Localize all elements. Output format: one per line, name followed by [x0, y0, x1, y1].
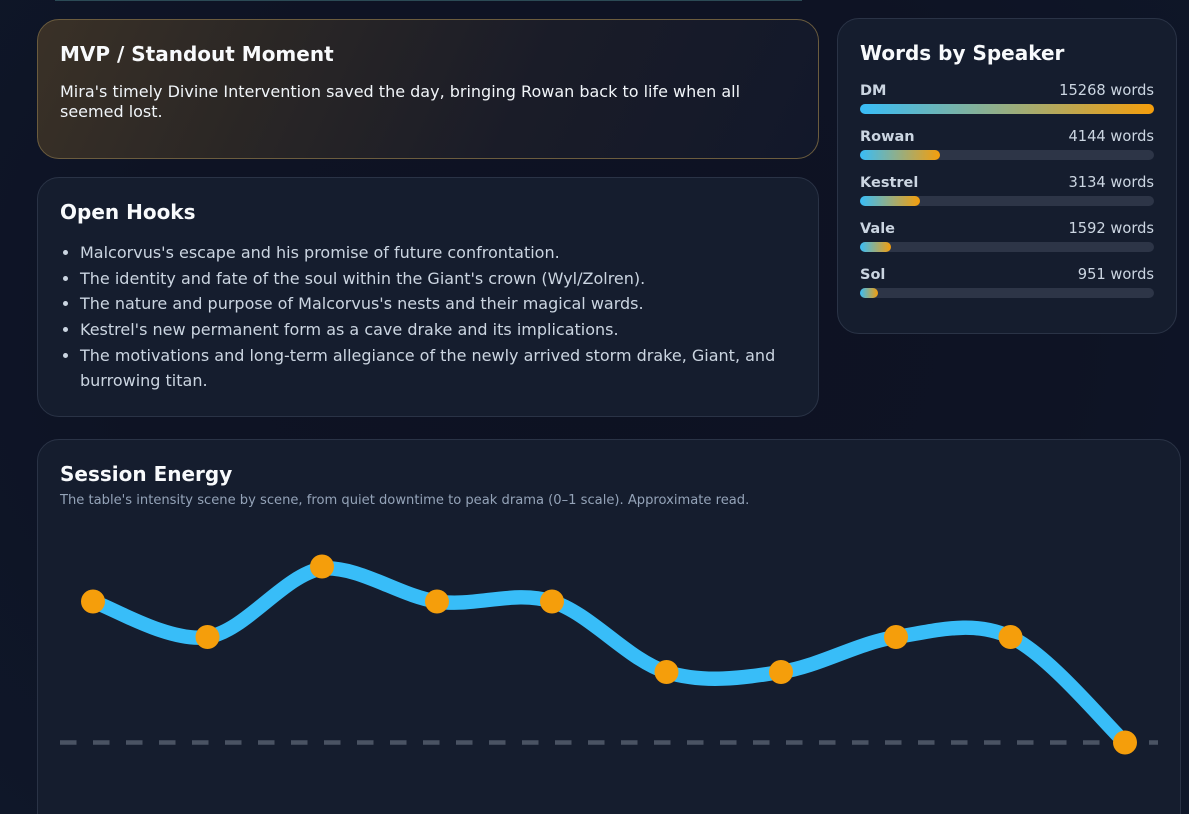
heading: words by speaker: Words by Speaker — [860, 41, 1064, 65]
bar: Vale — [860, 220, 1154, 252]
heading: MVP: MVP / Standout Moment — [60, 42, 334, 66]
bar: Vale: Vale — [860, 221, 895, 237]
data points — [81, 554, 1137, 754]
bar: Rowan — [860, 128, 1154, 160]
bar: Rowan: 4144 words — [1068, 128, 1154, 145]
bar: Sol — [860, 266, 1154, 298]
list: open hooks: The motivations and long-term allegiance of the newly arrived storm drake, Giant, and burrowing titan. — [80, 346, 775, 390]
bar: Kestrel: Kestrel — [860, 175, 918, 191]
bar: Sol: 951 words — [1078, 266, 1154, 283]
list: open hooks: Kestrel's new permanent form as a cave drake and its implications. — [80, 320, 619, 339]
heading: open hooks: Open Hooks — [60, 200, 196, 224]
bar: DM — [860, 82, 1154, 114]
bar: DM: DM — [860, 83, 886, 99]
list: open hooks: Malcorvus's escape and his promise of future confrontation. — [80, 243, 560, 262]
bar: Vale: 1592 words — [1068, 220, 1154, 237]
panel: words by speaker — [837, 18, 1177, 334]
text: MVP description: Mira's timely Divine Intervention saved the day, bringing Rowan back to life when all seemed lost. — [60, 82, 740, 121]
panel: MVP / standout moment — [37, 19, 819, 159]
list: open hooks: The nature and purpose of Malcorvus's nests and their magical wards. — [80, 294, 644, 313]
bar: Kestrel — [860, 174, 1154, 206]
text: chart description: The table's intensity scene by scene, from quiet downtime to peak drama (0–1 scale). Approximate read. — [60, 493, 749, 508]
list: open hooks: The identity and fate of the soul within the Giant's crown (Wyl/Zolren). — [80, 269, 645, 288]
bar: DM: 15268 words — [1059, 82, 1154, 99]
energy line — [93, 568, 1125, 742]
bar: Kestrel: 3134 words — [1068, 174, 1154, 191]
panel: session energy — [37, 439, 1181, 814]
bar: Sol: Sol — [860, 267, 885, 283]
heading: session energy: Session Energy — [60, 462, 232, 486]
panel: open hooks — [37, 177, 819, 417]
list: open hooks — [63, 243, 775, 390]
bar: Rowan: Rowan — [860, 129, 915, 145]
